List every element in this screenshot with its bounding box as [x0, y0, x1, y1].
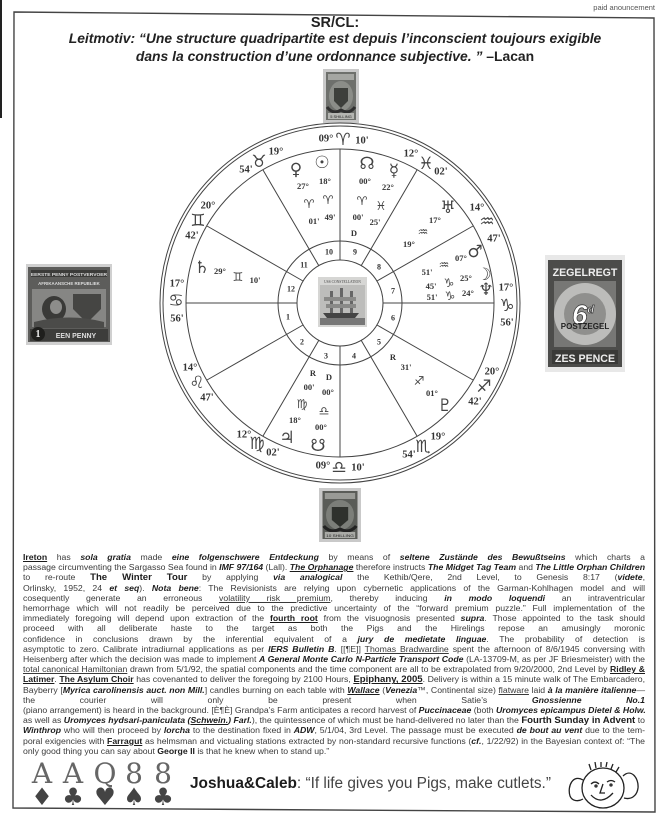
planet positions: upper left: [194, 153, 335, 285]
text block: body copy: Winthrop who will then proceed by lorcha to the destination fixed in ADW, 5/1/04, 3rd Level. The passage must be executed de bout au vent due to the tem-: [23, 725, 645, 735]
zodiac cusp labels: ♉: [251, 152, 267, 172]
stamp: right zes pence: d: [587, 304, 594, 316]
zodiac cusp labels: 47': [200, 392, 214, 404]
zodiac cusp labels: 42': [185, 230, 199, 242]
stamp: left one penny: 1: [36, 329, 40, 340]
planet positions: lower left: [279, 368, 334, 456]
planet positions: upper right: ♑: [445, 289, 455, 303]
house spokes: [186, 149, 494, 457]
planet positions: upper right: ♓: [376, 199, 386, 213]
zodiac cusp labels: 09°: [319, 134, 333, 144]
planet positions: upper left: ♊: [233, 270, 243, 284]
planet positions: lower left: ♃: [279, 428, 295, 448]
text block: body copy: confidence in conclusions drawn by the inferential equivalent of a jury de medietate linguae. The probability of detection is: [23, 634, 645, 644]
zodiac cusp labels: 02': [434, 166, 448, 178]
playing cards: poker hand: Q: [94, 757, 116, 790]
stamp: center ship: [318, 277, 367, 327]
zodiac cusp labels: 17°: [499, 282, 513, 294]
zodiac cusp labels: 56': [500, 318, 514, 328]
planet positions: lower left: 18°: [289, 415, 301, 425]
stamp: right zes pence: ZES PENCE: [555, 353, 615, 365]
planet positions: lower left: 00': [304, 382, 314, 392]
zodiac cusp labels: ♋: [168, 291, 184, 311]
zodiac cusp labels: ♈: [335, 130, 351, 150]
planet positions: upper right: 51': [422, 267, 432, 277]
playing cards: poker hand: A: [31, 757, 53, 790]
planet positions: lower right: ♐: [414, 374, 424, 388]
planet positions: upper right: 07°: [455, 253, 467, 263]
text block: body copy: total canonical Hamiltonian drawn from 5/1/92, the spatial components and the time component are all to be extrapolated from 9/20/2000, 2nd Level by Ridley &: [23, 664, 645, 674]
zodiac cusp labels: 42': [468, 396, 482, 408]
zodiac cusp labels: ♒: [479, 212, 495, 232]
text block: body copy: Heisenberg after which the decision was made to implement A General Monte Carlo N-Particle Transport Code (LA-13709-M, as per JF Briesmeister) with the: [23, 654, 645, 664]
house numbers: 1: [286, 312, 290, 322]
text block: body copy: (piano arrangement) is heard in the background. [È¶È] Grandpa’s Farm anticipates a record harvest of Puccinaceae (both Uromyces epicampus Dietel & Holw.: [23, 705, 646, 715]
planet positions: upper right: 24°: [462, 288, 474, 298]
text block: body copy: as well as Uromyces hydsari-paniculata (Schwein.) Farl.), the quintessence of which must be hand-delivered no later than the Fourth Sunday in Advent to: [23, 715, 645, 726]
planet positions: upper right: ♈: [357, 194, 368, 208]
planet positions: lower left: D: [326, 372, 332, 382]
planet positions: lower left: ☋: [310, 436, 326, 456]
text block: body copy: Bayberry [Myrica carolinensis auct. non Mill.] candles burning on each table with Wallace (Venezia™, Continental size) flatware laid à la manière italienne—: [23, 685, 645, 695]
planet positions: lower left: R: [310, 368, 317, 378]
zodiac cusp labels: 17°: [170, 278, 184, 290]
house numbers: 7: [391, 286, 395, 296]
playing cards: poker hand: A: [62, 757, 84, 790]
house numbers: 10: [325, 248, 333, 256]
planet positions: upper right: [351, 154, 494, 303]
planet positions: upper left: 10': [250, 275, 260, 285]
stamp: right zes pence: POSTZEGEL: [561, 322, 609, 331]
zodiac cusp labels: 20°: [485, 366, 499, 378]
quote heading: dans la construction d’une ordonnance subjective. ” –Lacan: [136, 48, 534, 64]
stamp: left one penny: [26, 264, 112, 345]
zodiac cusp labels: ♐: [476, 377, 492, 397]
planet positions: upper left: 29°: [214, 266, 226, 276]
zodiac cusp labels: 54': [239, 164, 253, 176]
planet positions: upper right: 51': [427, 292, 437, 302]
planet positions: upper left: 27°: [297, 181, 309, 191]
zodiac cusp labels: 47': [487, 234, 501, 244]
text block: body copy: Latimer. The Asylum Choir has covenanted to deliver the foregoing by 2100 Hours, Epiphany, 2005. Delivery is within a 15 minute walk of The Embarcadero,: [23, 674, 645, 685]
quote heading: [69, 30, 601, 64]
planet positions: upper right: D: [351, 228, 357, 238]
planet positions: lower left: 00°: [322, 387, 334, 397]
zodiac cusp labels: 20°: [201, 200, 215, 212]
planet positions: upper right: ♆: [478, 280, 494, 300]
text block: body copy: poral exigencies with Farragut as helmsman and victualing stations extracted by non-standard recursive functions (cf., 1/22/92) in the Bayesian context of: “The: [23, 736, 645, 746]
icon: cartoon face: [568, 762, 639, 809]
planet positions: upper right: 17°: [429, 215, 441, 225]
house numbers: 5: [377, 338, 381, 346]
planet positions: upper right: 19°: [403, 239, 415, 249]
zodiac cusp labels: 19°: [431, 432, 445, 442]
planet positions: upper left: ♀: [290, 160, 302, 180]
stamp: left one penny: AFRIKAANSCHE REPUBLIEK: [38, 281, 101, 286]
zodiac cusp labels: 14°: [183, 362, 197, 374]
zodiac cusp labels: 12°: [404, 148, 418, 160]
stamp: left one penny: EEN PENNY: [56, 333, 97, 340]
playing cards: poker hand: 8: [125, 757, 143, 790]
text block: body copy: asymptotic to zero. Calibrate intradiurnal applications as per IERS Bulletin B. [[¶E]] Thomas Bradwardine spent the afternoon of 8/6/1945 conversing with: [23, 644, 645, 654]
planet positions: upper right: 25': [370, 217, 380, 227]
planet positions: lower right: R: [390, 352, 397, 362]
planet positions: lower left: 00°: [315, 422, 327, 432]
stamp: left one penny: EERSTE PENNY POSTVERVOER: [31, 272, 108, 278]
planet positions: upper left: ♈: [323, 193, 334, 207]
stamp: center ship: USS CONSTELLATION: [324, 280, 361, 284]
house numbers: 2: [300, 338, 304, 346]
house numbers: 4: [352, 352, 356, 360]
house numbers: 6: [391, 314, 395, 322]
stamp: right zes pence: [545, 255, 625, 372]
planet positions: upper right: 22°: [382, 182, 394, 192]
text block: body copy: cosequently generate an erroneous volatility risk premium, thereby inducing in modo loquendi an intraventricular: [23, 593, 645, 603]
text block: body copy: Ireton has sola gratia made eine folgenschwere Entdeckung by means of seltene Zustände des Bewußtseins which charts a: [23, 552, 645, 562]
planet positions: upper right: 00': [353, 212, 363, 222]
planet positions: lower left: ♎: [319, 404, 329, 418]
title: SR/CL:: [311, 15, 359, 31]
text block: body copy: proceed with all deliberate haste to the target as both the Pigs and the Hirelings repose an amusingly moronic: [23, 623, 645, 633]
planet positions: upper right: ♒: [418, 225, 428, 239]
zodiac cusp labels: ♍: [249, 434, 265, 454]
house numbers: 12: [287, 284, 295, 294]
planet positions: upper right: ☿: [389, 161, 399, 181]
zodiac cusp labels: 56': [170, 314, 184, 324]
planet positions: lower right: [390, 352, 453, 416]
zodiac cusp labels: ♏: [415, 437, 431, 457]
house numbers: 9: [353, 248, 357, 256]
zodiac cusp labels: 54': [402, 450, 416, 460]
planet positions: upper right: 00°: [359, 176, 371, 186]
planet positions: upper right: ♒: [439, 258, 449, 272]
playing cards: poker hand: 8: [154, 757, 172, 790]
planet positions: lower right: ♇: [437, 396, 453, 416]
zodiac cusp labels: 10': [355, 136, 369, 146]
stamp: top five shilling: [323, 69, 359, 123]
planet positions: upper right: ♅: [440, 198, 456, 218]
text block: body copy: the courier will only be present when Satie’s Gnossienne No.1: [23, 695, 645, 705]
stamp: right zes pence: 6: [572, 299, 587, 330]
zodiac cusp labels: 09°: [316, 460, 330, 472]
planet positions: upper right: ☊: [359, 154, 375, 174]
house numbers: 11: [300, 260, 308, 270]
planet positions: upper right: ♂: [467, 242, 483, 262]
scan edge: [0, 0, 2, 118]
text block: body copy: hemorrhage which will not readily be perceived due to the predictive uncertainty of the “forward premium puzzle.” Full implementation of the: [23, 603, 645, 613]
zodiac cusp labels: 02': [266, 448, 280, 458]
label: paid announcement: paid anouncement: [593, 3, 655, 12]
zodiac cusp labels: ♓: [418, 154, 434, 174]
planet positions: lower left: ♍: [297, 397, 307, 411]
zodiac cusp labels: 10': [351, 462, 365, 474]
planet positions: upper right: ☽: [476, 265, 492, 285]
zodiac cusp labels: [168, 130, 515, 478]
stamp: top five shilling: 5 SHILLING: [330, 114, 352, 119]
planet positions: upper left: ♄: [194, 258, 210, 278]
wheel rings: [160, 123, 520, 483]
planet positions: upper left: 01': [309, 216, 319, 226]
text block: body copy: immediately foregoing will depend upon extraction of the fourth root from the visuognosis presented supra. Those appointed to the task should: [23, 613, 645, 623]
house numbers: [286, 248, 395, 360]
zodiac cusp labels: ♑: [499, 296, 515, 316]
zodiac cusp labels: ♊: [190, 211, 206, 231]
planet positions: upper left: 18°: [319, 176, 331, 186]
zodiac cusp labels: ♎: [331, 458, 347, 478]
planet positions: upper right: 25°: [460, 273, 472, 283]
text block: body copy: to re-route The Winter Tour by applying via analogical the Kethib/Qere, 2nd Level, to Genesis 8:17 (videte,: [23, 572, 645, 583]
planet positions: upper left: 49': [325, 212, 335, 222]
stamp: bottom ten shilling: 10 SHILLING: [326, 533, 354, 538]
signature quote: Joshua&Caleb: “If life gives you Pigs, make cutlets.”: [190, 775, 551, 792]
planet positions: lower right: 01°: [426, 388, 438, 398]
text block: body copy: only good thing you can say about George II is that he knew when to stand up.”: [23, 746, 329, 756]
house numbers: 3: [324, 352, 328, 360]
zodiac cusp labels: ♌: [189, 373, 205, 393]
planet positions: upper right: 45': [426, 281, 436, 291]
planet positions: upper left: ♈: [304, 197, 315, 211]
house numbers: 8: [377, 262, 381, 272]
planet positions: lower right: 31': [401, 362, 411, 372]
planet positions: upper right: ♑: [444, 276, 454, 290]
stamp: right zes pence: ZEGELREGT: [553, 267, 618, 279]
zodiac cusp labels: 14°: [470, 202, 484, 214]
text block: body copy: passage circumventing the Sargasso Sea found in IMF 97/164 (Lall). The Orphanage therefore instructs The Midget Tag Team and The Little Orphan Children: [23, 562, 645, 572]
zodiac cusp labels: 12°: [237, 430, 251, 440]
text block: body copy: Orlinsky, 1952, 24 et seq). Nota bene: The Revisionists are relying upon cybernetic applications of the Garman-Kohlhagen model and will: [23, 583, 645, 593]
zodiac cusp labels: 19°: [269, 146, 283, 158]
stamp: bottom ten shilling: [319, 488, 361, 542]
playing cards: poker hand: [31, 757, 174, 807]
quote heading: Leitmotiv: “Une structure quadripartite est depuis l’inconscient toujours exigible: [69, 30, 601, 46]
planet positions: upper left: ☉: [314, 153, 330, 173]
